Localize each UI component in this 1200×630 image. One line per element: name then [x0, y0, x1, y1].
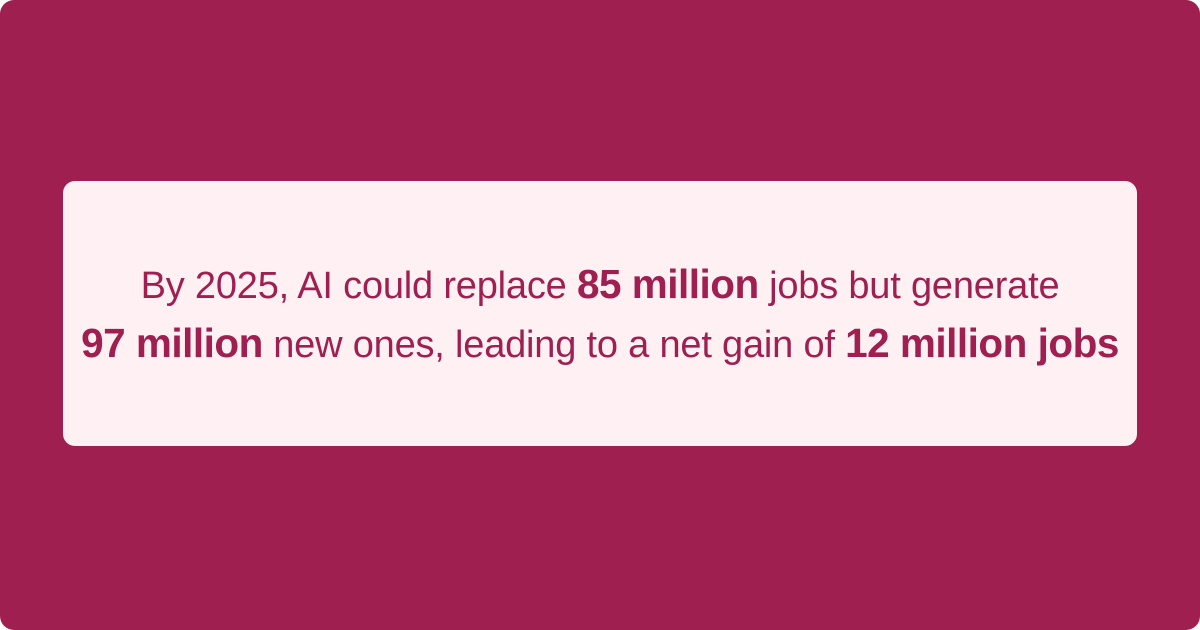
- panel: statistic card: [63, 181, 1137, 446]
- text block: statistic statement: [81, 261, 1119, 366]
- text block: statistic statement: 97 million new ones, leading to a net gain of 12 million jobs: [81, 320, 1119, 366]
- text block: statistic statement: By 2025, AI could replace 85 million jobs but generate: [141, 261, 1059, 307]
